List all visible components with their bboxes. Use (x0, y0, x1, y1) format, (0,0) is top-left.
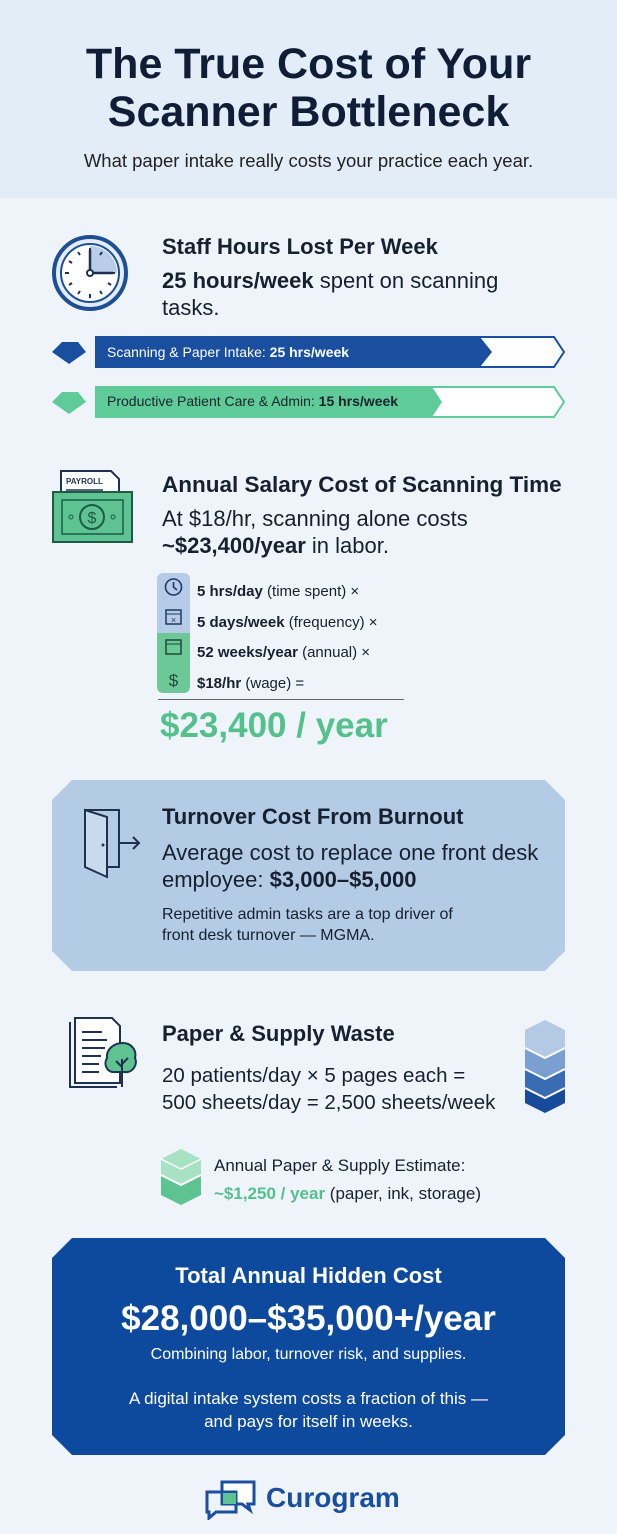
supply estimate (214, 1156, 481, 1203)
section 1 text (162, 268, 498, 320)
icon: door (84, 808, 140, 878)
turnover note: Repetitive admin tasks are a top driver of (162, 906, 453, 923)
icon: payroll: PAYROLL (66, 477, 103, 486)
section 2 text: At $18/hr, scanning alone costs (162, 506, 468, 531)
section 2 text: ~$23,400/year in labor. (162, 533, 389, 558)
bar label: scanning: Scanning & Paper Intake: 25 hrs/week (107, 344, 349, 360)
result: $23,400 / year (160, 706, 388, 745)
supply estimate: Annual Paper & Supply Estimate: (214, 1156, 465, 1175)
turnover note: front desk turnover — MGMA. (162, 927, 375, 944)
subtitle: What paper intake really costs your practice each year. (84, 150, 533, 171)
bar: scanning (52, 336, 566, 418)
section 4 text: 500 sheets/day = 2,500 sheets/week (162, 1091, 495, 1114)
title: The True Cost of Your (86, 40, 531, 88)
turnover note (162, 908, 453, 940)
icon: payroll (52, 470, 133, 543)
bar label: productive: Productive Patient Care & Admin: 15 hrs/week (107, 393, 398, 409)
panel: turnover (52, 780, 565, 971)
total note: A digital intake system costs a fraction of this — (129, 1389, 488, 1408)
logo: Curogram: Curogram (266, 1482, 400, 1513)
section 4 text (162, 1064, 496, 1114)
title (86, 40, 531, 136)
formula lines (197, 583, 378, 692)
formula lines: 5 hrs/day (time spent) × (197, 583, 359, 600)
turnover text: employee: $3,000–$5,000 (162, 867, 416, 892)
logo: Curogram (206, 1480, 400, 1520)
total subtext: Combining labor, turnover risk, and supplies. (151, 1346, 466, 1363)
icon: blue stack (524, 1020, 566, 1113)
total note (129, 1392, 488, 1430)
formula icon strip: × (171, 615, 176, 625)
turnover text: Average cost to replace one front desk (162, 840, 538, 865)
icon: clock (52, 235, 128, 311)
section 4 heading: Paper & Supply Waste (162, 1021, 395, 1046)
icon: payroll: $ (88, 510, 97, 527)
total heading: Total Annual Hidden Cost (175, 1263, 442, 1288)
formula lines: 52 weeks/year (annual) × (197, 644, 370, 661)
section 1 text: tasks. (162, 295, 219, 320)
formula icon strip: $ (169, 671, 179, 690)
formula lines: 5 days/week (frequency) × (197, 614, 378, 630)
turnover heading: Turnover Cost From Burnout (162, 804, 463, 829)
section 1 heading: Staff Hours Lost Per Week (162, 234, 438, 259)
icon: paper and tree (69, 1017, 137, 1088)
panel: total (52, 1238, 565, 1455)
title: Scanner Bottleneck (108, 88, 509, 136)
supply estimate: ~$1,250 / year (paper, ink, storage) (214, 1184, 481, 1203)
total note: and pays for itself in weeks. (204, 1412, 413, 1431)
section 2 heading: Annual Salary Cost of Scanning Time (162, 472, 562, 497)
total amount: $28,000–$35,000+/year (121, 1299, 496, 1338)
formula icon strip (157, 573, 190, 693)
formula lines: $18/hr (wage) = (197, 674, 304, 692)
section 1 text: 25 hours/week spent on scanning (162, 268, 498, 293)
section 4 text: 20 patients/day × 5 pages each = (162, 1064, 465, 1087)
turnover text (162, 844, 538, 892)
section 2 text (162, 506, 468, 558)
icon: green stack (160, 1149, 202, 1205)
